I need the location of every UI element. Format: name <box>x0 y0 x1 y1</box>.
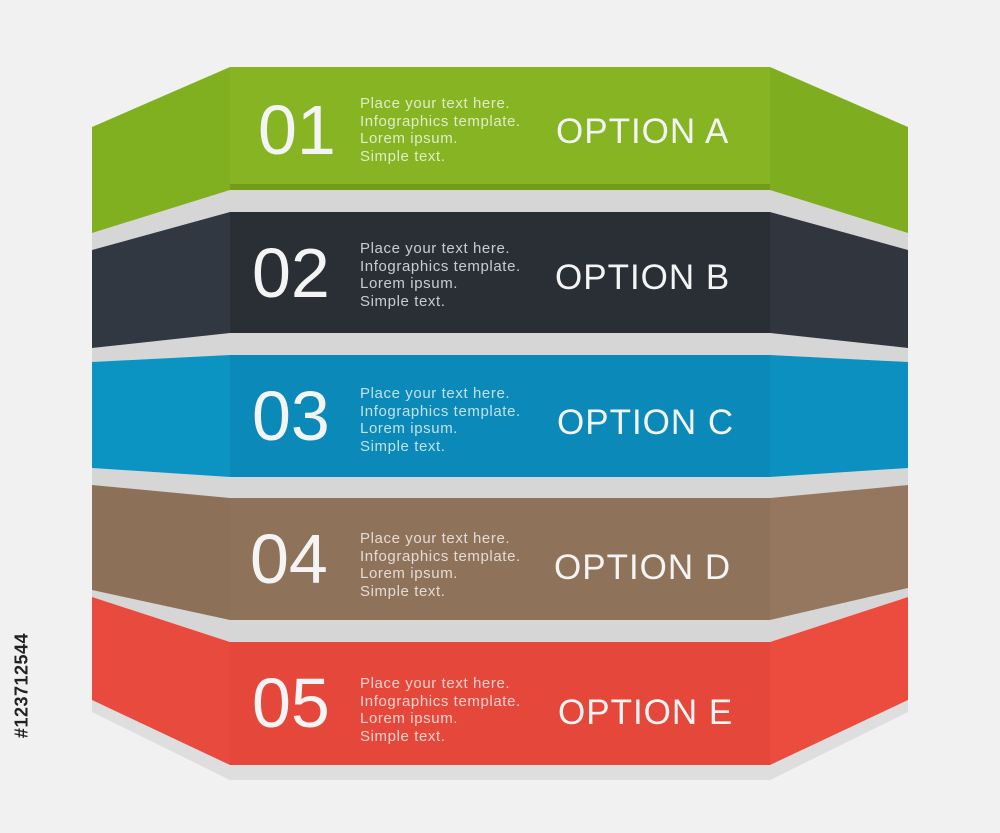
band 5 content: Simple text. <box>360 728 446 744</box>
band 5 content: Infographics template. <box>360 692 521 710</box>
band 5 content <box>252 664 733 744</box>
band 3 content: 03 <box>252 377 330 455</box>
band 2 dark <box>92 212 908 348</box>
band 4 content: Simple text. <box>360 582 446 600</box>
band 3 content <box>252 377 734 455</box>
stock id text: #123712544 <box>12 633 32 738</box>
band 5 content: OPTION E <box>558 693 733 732</box>
band 4 content: 04 <box>250 520 328 598</box>
band 1 content: OPTION A <box>556 112 729 151</box>
band 4 brown <box>92 485 908 620</box>
band 4 content: Place your text here. <box>360 530 510 547</box>
band 3 content: Lorem ipsum. <box>360 420 458 437</box>
band 1 content: Infographics template. <box>360 112 521 130</box>
band 2 content: 02 <box>252 234 330 312</box>
band 1 content: 01 <box>258 91 336 169</box>
band 2 content: Place your text here. <box>360 240 510 257</box>
band 4 content <box>250 520 731 600</box>
band 5 red <box>92 597 908 765</box>
band shadows <box>92 190 908 780</box>
band 5 content: Place your text here. <box>360 675 510 692</box>
band 4 content: Lorem ipsum. <box>360 565 458 582</box>
band 2 content: OPTION B <box>555 258 730 297</box>
band 3 content: Simple text. <box>360 438 446 454</box>
band 3 content: OPTION C <box>557 403 734 442</box>
band 1 green <box>92 67 908 233</box>
band 2 content: Infographics template. <box>360 258 521 274</box>
band 3 blue <box>92 355 908 477</box>
band 5 content: 05 <box>252 664 330 742</box>
band 1 content: Place your text here. <box>360 95 510 112</box>
band 4 content: OPTION D <box>554 548 731 587</box>
band 2 content: Lorem ipsum. <box>360 275 458 292</box>
band 4 content: Infographics template. <box>360 548 521 564</box>
band 2 content <box>252 234 730 312</box>
band 3 content: Infographics template. <box>360 402 521 420</box>
band 1 content: Simple text. <box>360 148 446 164</box>
band 1 content: Lorem ipsum. <box>360 130 458 147</box>
band 5 content: Lorem ipsum. <box>360 710 458 727</box>
band 1 content <box>258 91 729 169</box>
band 3 content: Place your text here. <box>360 385 510 402</box>
band 2 content: Simple text. <box>360 292 446 310</box>
